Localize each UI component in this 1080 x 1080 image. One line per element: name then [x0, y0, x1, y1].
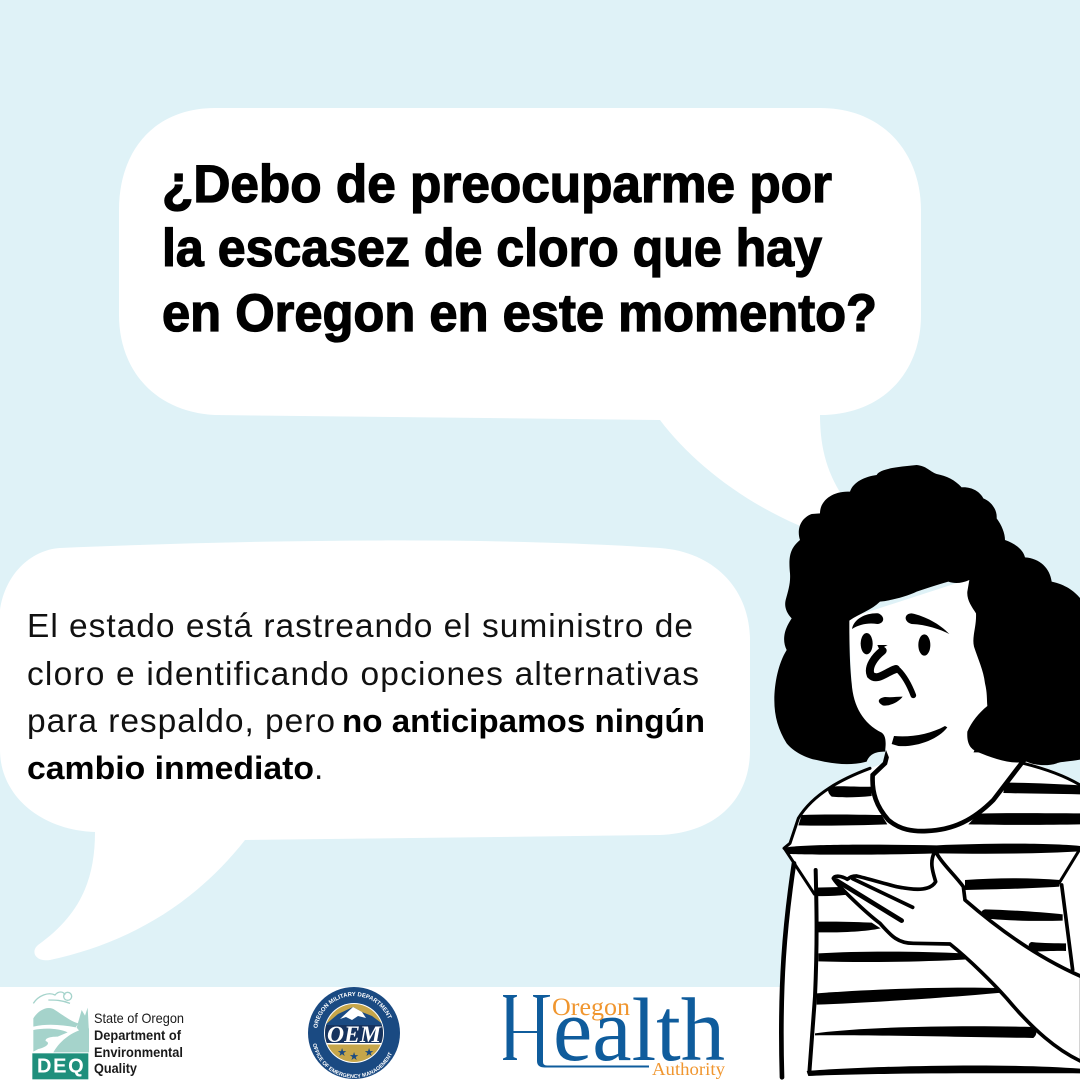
- answer text block: no anticipamos ningún: [342, 703, 705, 739]
- woman: head and hair: [774, 465, 1080, 765]
- fingers: [837, 879, 913, 921]
- logo: Oregon DEQ: [32, 992, 184, 1079]
- logo: Oregon Military Department OEM seal: OREGON MILITARY DEPARTMENT: [314, 992, 392, 1028]
- face: [848, 577, 990, 760]
- logo: Oregon Health Authority: [503, 981, 725, 1080]
- hair: [774, 465, 1080, 765]
- Health wordmark: ealth: [553, 981, 725, 1080]
- title: question heading: [162, 155, 877, 343]
- logo: Oregon Health Authority: Authority: [652, 1059, 725, 1079]
- answer text block: .: [314, 750, 323, 787]
- answer text block: cloro e identificando opciones alternativas: [27, 656, 699, 693]
- title: question heading: la escasez de cloro que hay: [162, 219, 822, 278]
- title: question heading: ¿Debo de preocuparme por: [162, 155, 832, 214]
- DEQ wordmark: Department of: [94, 1027, 181, 1043]
- DEQ wordmark: [94, 1010, 184, 1076]
- shirt stripes: [783, 783, 1080, 1076]
- logo: Oregon Military Department OEM seal: ★: [349, 1050, 359, 1063]
- logo: Oregon Military Department OEM seal: [308, 987, 400, 1079]
- logo: Oregon Health Authority: Oregon: [552, 994, 631, 1021]
- answer text block: para respaldo, pero: [27, 703, 335, 740]
- hand and forearm: [833, 853, 1080, 1062]
- DEQ wordmark: State of Oregon: [94, 1010, 184, 1026]
- title: question heading: en Oregon en este momento?: [162, 284, 877, 343]
- DEQ landscape icon: [32, 992, 89, 1079]
- woman: torso and arm: [781, 750, 1080, 1080]
- speech bubble: question: [119, 108, 921, 535]
- shirt outlines: [781, 763, 1080, 1077]
- answer text block: cambio inmediato: [27, 750, 314, 786]
- answer text block: [27, 608, 705, 787]
- logo: Oregon Military Department OEM seal: ★: [337, 1046, 347, 1059]
- DEQ wordmark: Quality: [94, 1060, 137, 1076]
- DEQ landscape icon: DEQ: [37, 1055, 84, 1077]
- logo: Oregon Military Department OEM seal: OEM: [327, 1022, 383, 1047]
- DEQ wordmark: Environmental: [94, 1044, 183, 1060]
- answer text block: El estado está rastreando el suministro de: [27, 608, 693, 645]
- neck and collar: [873, 750, 1024, 831]
- illustration: worried woman: [774, 465, 1080, 1080]
- speech bubble: answer: [0, 540, 750, 960]
- logo: Oregon Military Department OEM seal: ★: [364, 1046, 374, 1059]
- facial features: [852, 613, 949, 746]
- logo: Oregon Military Department OEM seal: OFFICE OF EMERGENCY MANAGEMENT: [313, 1044, 392, 1078]
